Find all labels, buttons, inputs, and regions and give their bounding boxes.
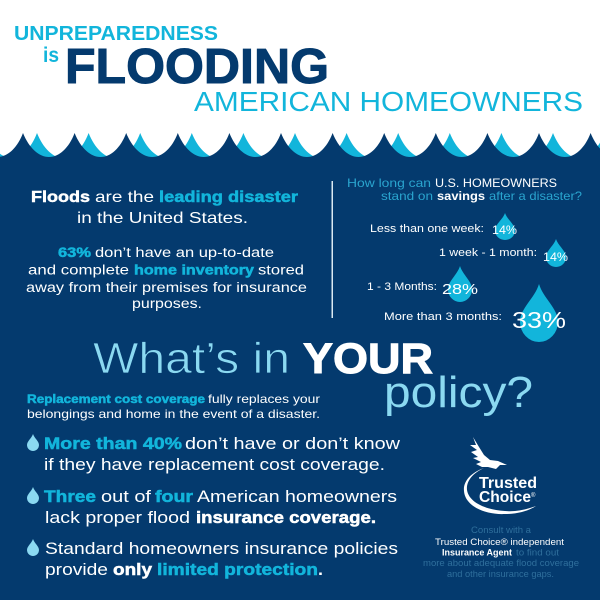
bullet: standard policies: provide [45,560,108,579]
panel: flood facts: stored [258,262,304,278]
heading: what's in your policy: YOUR [303,335,433,383]
bullet: three out of four: four [155,487,193,506]
heading: what's in your policy: What’s in [93,334,290,383]
heading: what's in your policy [93,334,533,417]
panel: flood facts: don’t have an up-to-date [95,245,274,260]
row: 1 to 3 months 28%: 28% [442,281,478,298]
heading: what's in your policy: policy? [384,368,533,417]
title: is [43,44,59,67]
bullet: standard policies: limited protection [157,560,318,579]
title: UNPREPAREDNESS [14,23,218,45]
chart heading: after a disaster? [489,189,582,203]
bullet: standard policies: Standard homeowners insurance policies [45,539,398,558]
bullet: more than 40%: if they have replacement cost coverage. [44,455,385,474]
row: less than one week 14%: Less than one week: [370,223,484,235]
bullet: three out of four: American homeowners [197,487,397,506]
bullet: standard policies: only [113,560,153,579]
bullet: standard policies: . [318,560,323,579]
bullet: three out of four [27,487,397,527]
logo: trusted choice: Trusted [479,475,537,492]
bullet: more than 40%: More than 40% [44,434,182,453]
chart heading: savings [437,189,485,203]
bullet: three out of four: insurance coverage. [196,508,376,527]
text: consult with an agent: Insurance Agent [442,548,513,558]
panel: flood facts: Floods [31,189,90,206]
bullet: standard policies [27,539,398,579]
text: consult with an agent: more about adequate flood coverage [423,558,579,569]
bullet: three out of four: lack proper flood [45,508,190,527]
row: 1 to 3 months 28%: 1 - 3 Months: [367,281,437,293]
chart heading: stand on [381,189,433,203]
row: more than 3 months 33%: More than 3 months: [384,311,502,323]
logo: trusted choice: ® [531,492,536,499]
panel: flood facts: and complete [28,262,129,278]
chart heading [347,176,582,203]
row: more than 3 months 33%: 33% [512,307,566,333]
panel: flood facts [26,189,307,311]
row: 1 week to 1 month 14% [439,239,568,267]
intro text: replacement cost [27,392,320,421]
row: less than one week 14% [370,213,517,240]
text: consult with an agent [423,525,579,580]
panel: savings chart [347,176,582,342]
bullet: three out of four: Three [44,487,96,506]
row: 1 to 3 months 28% [367,266,478,302]
logo: trusted choice [464,437,537,514]
row: 1 week to 1 month 14%: 1 week - 1 month: [439,247,537,259]
text: consult with an agent: Consult with a [471,525,532,536]
background [0,157,600,600]
intro text: replacement cost: Replacement cost coverage [27,392,205,406]
row: 1 week to 1 month 14%: 14% [543,250,568,264]
panel: flood facts: away from their premises for insurance [26,280,307,295]
bullet: more than 40%: don’t have or don’t know [185,434,401,453]
title: AMERICAN HOMEOWNERS [194,86,583,117]
title [14,23,583,117]
panel: flood facts: home inventory [134,262,255,278]
panel: flood facts: purposes. [132,296,202,311]
text: consult with an agent: Trusted Choice® independent [435,537,564,548]
bullet: more than 40% [27,434,401,474]
panel: flood facts: in the United States. [77,210,248,227]
intro text: replacement cost: fully replaces your [208,392,320,406]
panel: flood facts: leading disaster [159,189,298,206]
text: consult with an agent: and other insurance gaps. [447,569,554,580]
chart heading: U.S. HOMEOWNERS [435,176,557,190]
chart heading: How long can [347,176,431,190]
intro text: replacement cost: belongings and home in the event of a disaster. [27,407,320,421]
row: less than one week 14%: 14% [492,223,517,237]
logo: trusted choice: Choice [479,489,531,506]
panel: flood facts: 63% [58,245,91,260]
panel: flood facts: are the [95,189,154,206]
waves divider [0,133,600,165]
row: more than 3 months 33% [384,284,566,342]
text: consult with an agent: to find out [516,548,559,558]
bullet: three out of four: out of [101,487,151,506]
title: FLOODING [65,40,329,94]
